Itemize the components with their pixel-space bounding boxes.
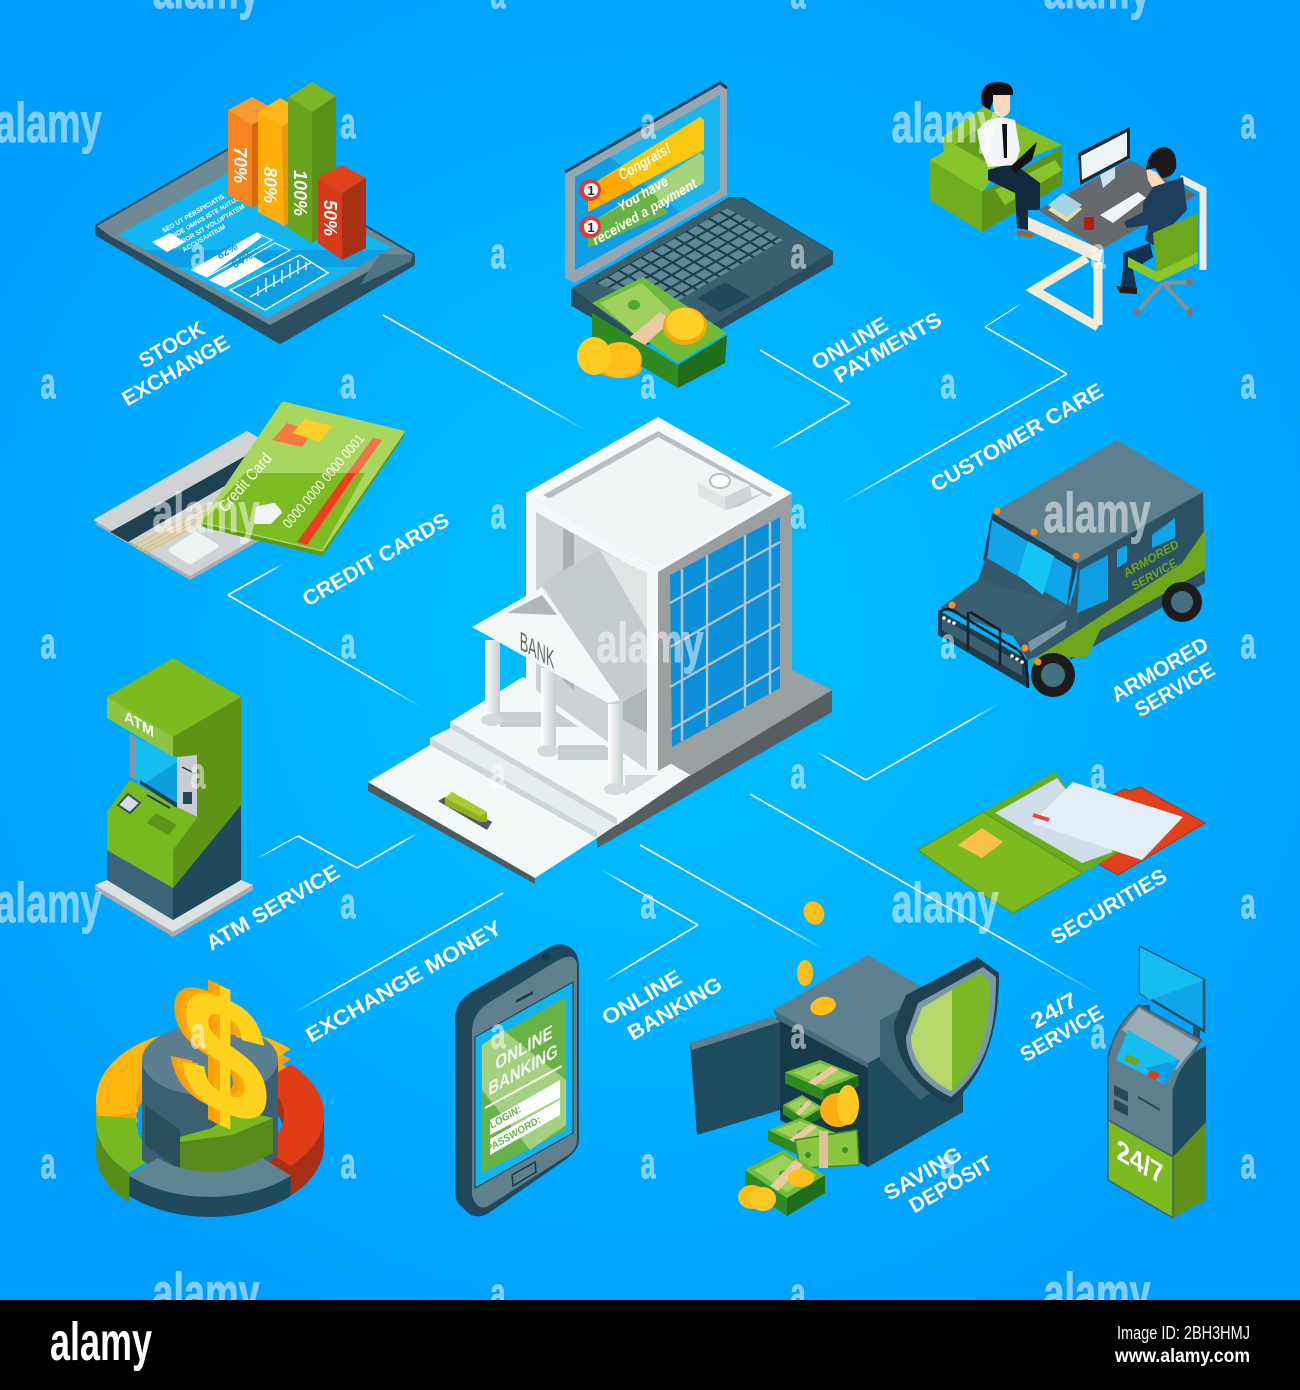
icon: bank building	[368, 417, 832, 884]
watermark: a	[1240, 1139, 1256, 1188]
label: 24/7 service: 24/7	[1027, 989, 1081, 1033]
icon: smartphone online banking: ONLINE	[495, 1021, 553, 1076]
image id: Image ID: 2BH3HMJ	[1117, 1323, 1250, 1343]
watermark: a	[640, 879, 656, 928]
yellow segment	[116, 1041, 276, 1135]
left face	[526, 493, 658, 775]
label: customer care: CUSTOMER CARE	[927, 379, 1107, 497]
green sofa	[930, 107, 1062, 232]
watermark: a	[640, 99, 656, 148]
label: online payments: ONLINE	[808, 313, 892, 375]
watermark: a	[340, 99, 356, 148]
label: online banking: ONLINE	[598, 966, 686, 1030]
grey segment	[129, 1167, 291, 1217]
watermark: alamy	[1044, 1261, 1150, 1324]
shield	[894, 957, 999, 1104]
watermark: a	[490, 229, 506, 278]
icon: credit cards: 0000 0000 0000 0001	[279, 430, 367, 531]
icon: safe with shield and cash	[690, 898, 999, 1216]
bar chart: 100%	[290, 170, 310, 216]
icon: securities folder	[918, 772, 1205, 913]
label: armored service: ARMORED	[1107, 633, 1213, 707]
label: saving deposit: SAVING	[880, 1143, 966, 1205]
website: www.alamy.com	[1114, 1346, 1250, 1367]
bar chart: 70%	[230, 147, 250, 183]
notification banners	[579, 117, 704, 248]
icon: stock exchange tablet	[97, 82, 413, 342]
cash and coins	[738, 1060, 859, 1216]
label: online payments: PAYMENTS	[830, 308, 946, 388]
icon: ATM machine	[95, 658, 253, 937]
red segment	[276, 1073, 324, 1196]
watermark: a	[190, 229, 206, 278]
footer bar	[0, 1300, 1300, 1390]
roof	[526, 417, 792, 572]
watermark: a	[940, 1139, 956, 1188]
label: armored service: SERVICE	[1131, 658, 1219, 722]
watermark: a	[40, 359, 56, 408]
tablet screen content: ERROR SIT VOLUPTATEM	[172, 203, 246, 250]
watermark: a	[1090, 749, 1106, 798]
label: ATM service: ATM SERVICE	[202, 861, 344, 955]
watermark: a	[1090, 229, 1106, 278]
center column	[142, 1060, 278, 1185]
watermark: alamy	[892, 91, 998, 154]
tablet screen content: 82%	[215, 241, 240, 262]
watermark: a	[190, 749, 206, 798]
watermark: a	[790, 1269, 806, 1318]
label: stock exchange: EXCHANGE	[118, 331, 234, 411]
watermark: alamy	[1044, 481, 1150, 544]
notification banners: 1	[587, 183, 595, 198]
watermark: a	[790, 1009, 806, 1058]
notification banners: You have	[614, 173, 671, 215]
icon: armored truck: SERVICE	[1129, 556, 1180, 593]
watermark: a	[490, 1269, 506, 1318]
watermark: a	[40, 1139, 56, 1188]
watermark: a	[490, 489, 506, 538]
bar chart	[228, 82, 366, 260]
bar chart: 80%	[260, 167, 280, 203]
icon: 24/7 kiosk: 24/7	[1117, 1133, 1163, 1193]
watermark: a	[790, 749, 806, 798]
label: exchange money: EXCHANGE MONEY	[302, 917, 506, 1047]
watermark: a	[940, 619, 956, 668]
watermark: a	[1240, 619, 1256, 668]
dollar sign: $	[182, 945, 268, 1167]
icon: smartphone online banking: BANKING	[488, 1040, 558, 1101]
label: online banking	[598, 966, 726, 1045]
watermark: alamy	[152, 481, 260, 544]
money and coins	[577, 277, 727, 388]
tablet screen content: UNDE OMNIS ISTE NATUS	[167, 195, 242, 242]
watermark: a	[340, 619, 356, 668]
label: saving deposit: DEPOSIT	[905, 1152, 997, 1218]
dollar sign: $	[170, 939, 256, 1161]
icon: credit cards	[95, 403, 403, 580]
label: 24/7 service: SERVICE	[1016, 1001, 1108, 1067]
watermark: a	[340, 1139, 356, 1188]
tablet screen content: 64%	[230, 250, 255, 271]
icon: 24/7 kiosk	[1108, 947, 1206, 1218]
icon: smartphone online banking: PASSWORD:	[484, 1115, 543, 1155]
seated client	[977, 82, 1040, 238]
tablet screen content: ACCUSANTIUM	[182, 224, 227, 254]
falling coins	[797, 898, 838, 1018]
watermark: a	[490, 1009, 506, 1058]
watermark: a	[490, 749, 506, 798]
connector lines	[228, 303, 1100, 1014]
label: online banking: BANKING	[624, 973, 726, 1045]
watermark: a	[1240, 359, 1256, 408]
bar chart: 50%	[320, 200, 340, 236]
icon: smartphone online banking: LOGIN:	[488, 1104, 524, 1131]
watermark: a	[790, 489, 806, 538]
footer logo: alamy	[50, 1312, 152, 1372]
watermark: a	[640, 1139, 656, 1188]
icon: customer care office	[930, 82, 1203, 327]
bank sign: BANK	[520, 625, 555, 675]
doormat	[438, 792, 492, 830]
label: saving deposit	[880, 1143, 997, 1218]
watermark: a	[340, 359, 356, 408]
tablet screen content: SED UT PERSPICIATIS,	[161, 193, 227, 235]
watermark: a	[190, 1009, 206, 1058]
seated banker	[1116, 147, 1198, 316]
watermark: a	[1240, 99, 1256, 148]
notification banners: 1	[587, 220, 595, 235]
watermark: alamy	[596, 611, 704, 674]
notification banners: Congrats!	[615, 140, 674, 184]
right face	[658, 493, 792, 771]
green segment	[96, 1116, 144, 1203]
icon: credit cards: Credit Card	[216, 450, 276, 516]
label: securities: SECURITIES	[1047, 865, 1171, 949]
portico	[542, 550, 647, 702]
icon: ATM machine: ATM	[124, 707, 154, 742]
icon: laptop with money	[565, 83, 832, 388]
watermark: a	[640, 359, 656, 408]
tablet screen content	[152, 193, 328, 310]
label: stock exchange: STOCK	[135, 317, 209, 373]
watermark: a	[940, 359, 956, 408]
watermark: alamy	[152, 1261, 260, 1324]
dollar sign: $	[176, 942, 262, 1164]
icon: armored truck: ARMORED	[1120, 537, 1182, 581]
label: credit cards: CREDIT CARDS	[299, 509, 453, 611]
desk	[1028, 127, 1203, 327]
watermark: a	[790, 229, 806, 278]
watermark: a	[1240, 879, 1256, 928]
notification banners: received a payment	[589, 175, 701, 248]
icon: smartphone online banking	[455, 944, 579, 1217]
icon: dollar on pie chart	[96, 939, 324, 1217]
watermark: alamy	[892, 871, 998, 934]
watermark: a	[1090, 1009, 1106, 1058]
icon: armored truck	[938, 440, 1205, 697]
watermark: a	[340, 879, 356, 928]
watermark: a	[40, 619, 56, 668]
